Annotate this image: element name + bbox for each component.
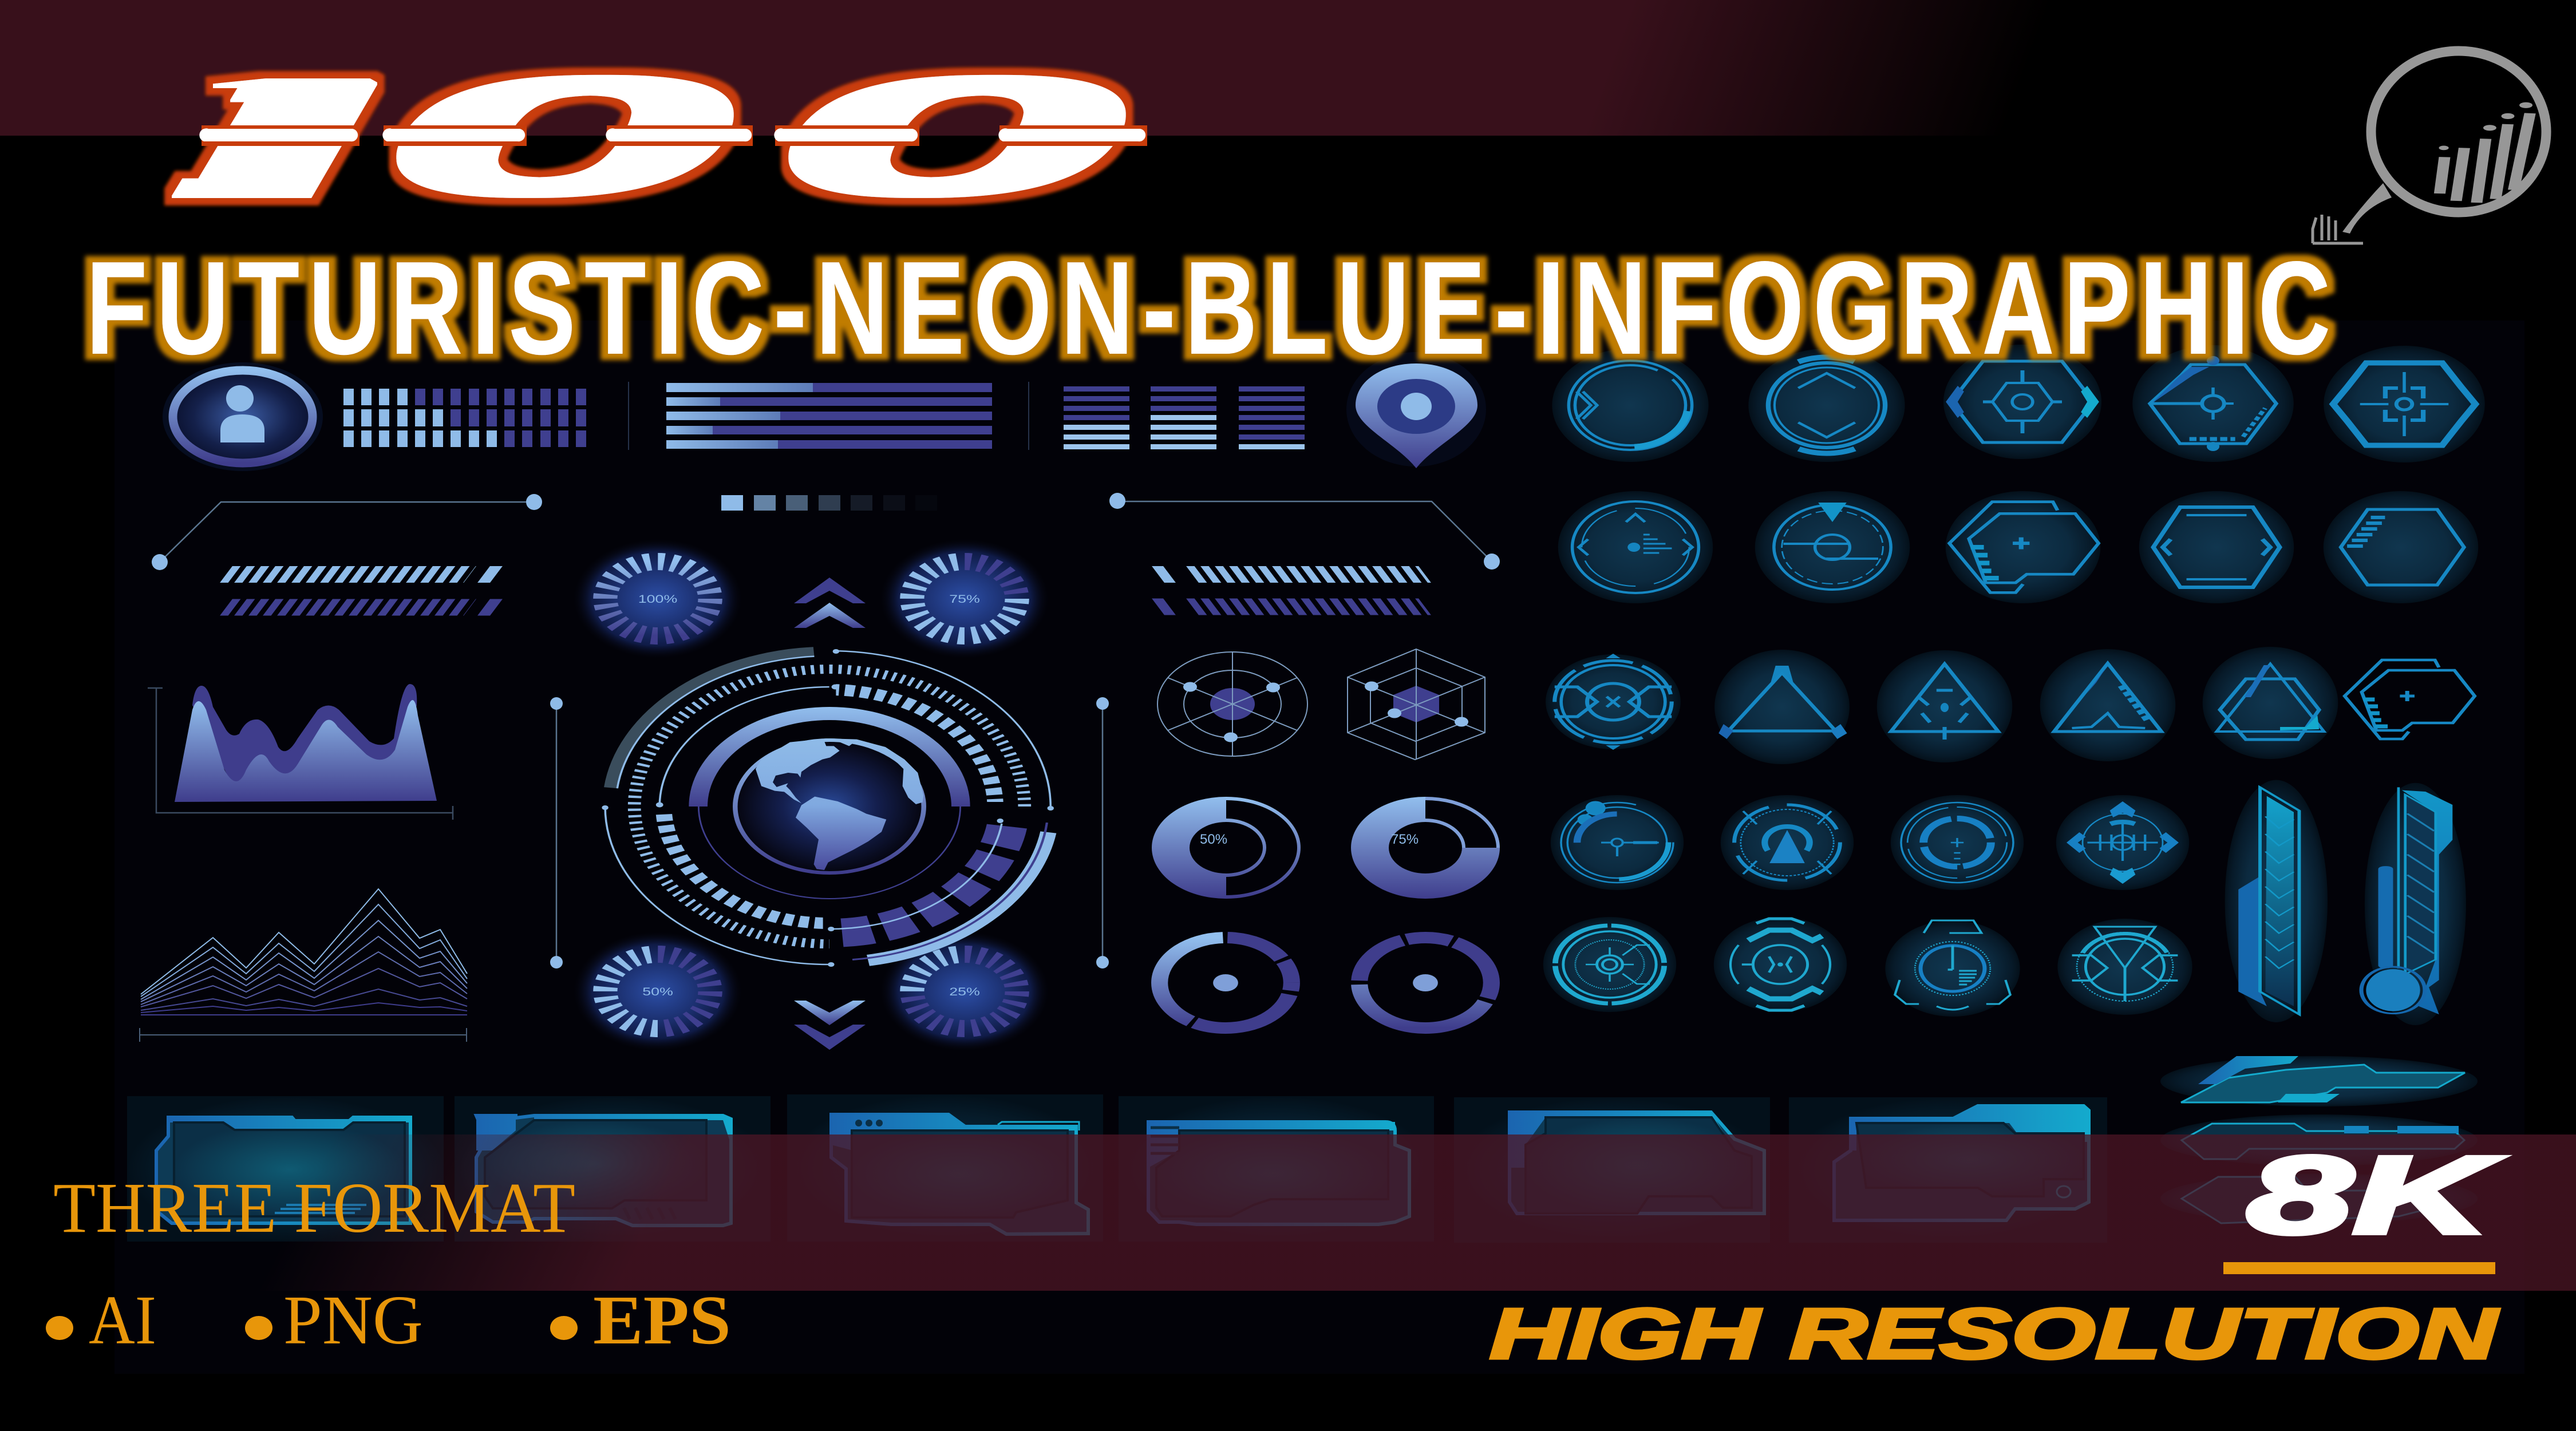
- icon: concentric cyan rings: [1543, 917, 1676, 1012]
- small tech panel 1: [2160, 1056, 2478, 1106]
- title: 100: [161, 65, 1147, 208]
- layered line chart: [140, 889, 467, 1042]
- format list: AI: [89, 1282, 156, 1359]
- bottom frame panels: [127, 1094, 2107, 1243]
- horizontal progress bars: [629, 382, 1029, 450]
- icon grid: row 2: [1558, 491, 2478, 603]
- icon: hexagon target: [1943, 345, 2101, 459]
- globe continents: [756, 738, 923, 870]
- icon: radar ring: [1558, 491, 1713, 603]
- icon grid: row 1: [1552, 345, 2485, 462]
- icon grid: row 5: [1543, 917, 2192, 1017]
- frame 5: [1510, 1112, 1764, 1213]
- frame 3: [831, 1114, 1088, 1234]
- area chart: [148, 684, 453, 820]
- icon: notched hexagon: [2132, 345, 2294, 462]
- dial: 100%: 100%: [638, 593, 677, 605]
- tall gauge left: [2225, 780, 2328, 1022]
- icon: user avatar: [163, 362, 323, 471]
- right hatch bars: [1158, 575, 1425, 607]
- dial: 75%: 75%: [949, 593, 980, 605]
- icon: location pin: [1346, 352, 1486, 468]
- icon: crossed ring: [1546, 654, 1681, 750]
- frame 2: [476, 1116, 731, 1226]
- dial: 75%: [886, 543, 1043, 655]
- title: 100: 0: [720, 41, 1195, 231]
- donut chart: 50%: [1152, 797, 1299, 899]
- icon: gear ring: [1891, 795, 2024, 890]
- equalizer stacks: [1064, 386, 1305, 449]
- radar chart: round: [1157, 652, 1307, 756]
- vertical line left of hub: [550, 697, 563, 969]
- small tech panel 2: [2160, 1114, 2478, 1166]
- left connector line: [152, 494, 542, 570]
- bottom maroon band: [0, 1134, 2576, 1291]
- title: 100: 0: [328, 41, 803, 231]
- format list: PNG: [283, 1282, 423, 1359]
- arrow: down chevrons: [794, 1001, 866, 1050]
- orange rule: [2223, 1262, 2495, 1274]
- icon grid: row 4: [1551, 795, 2189, 890]
- donut chart: 50%: 50%: [1200, 832, 1227, 847]
- icon: hexagon brackets: [2139, 491, 2294, 603]
- radar chart: hexagon: [1348, 649, 1485, 760]
- heading: three format: THREE FORMAT: [53, 1169, 575, 1248]
- left hatch bars: [226, 575, 496, 607]
- icon: triangle reticle: [1877, 650, 2012, 762]
- icon: triangle tabs: [1714, 650, 1850, 764]
- donut chart: 75%: 75%: [1391, 832, 1419, 847]
- central globe hub: [602, 649, 1054, 967]
- title: futuristic neon blue infographic: FUTURISTIC-NEON-BLUE-INFOGRAPHIC: [86, 233, 2331, 382]
- icon: double hexagon: [1946, 491, 2100, 603]
- icon: arrow target: [1721, 795, 1854, 890]
- top maroon band: [0, 0, 2118, 136]
- dark navy artboard: [114, 321, 2524, 1374]
- icon: triangle in ring: [2057, 919, 2192, 1015]
- icon: orbit dial: [1551, 795, 1684, 890]
- icon: winged ring: [1714, 917, 1847, 1012]
- tall gauge right: [2361, 783, 2466, 1025]
- dial: 50%: [579, 935, 736, 1047]
- icon: scope: [2056, 795, 2189, 890]
- icon: ring with diamonds: [1748, 349, 1905, 462]
- icon grid: row 3: [1546, 647, 2475, 764]
- label: high resolution: HIGH RESOLUTION: [1490, 1294, 2499, 1374]
- icon: clock frame: [1885, 920, 2020, 1017]
- dial: 100%: [573, 539, 742, 659]
- arrow: up chevrons: [794, 578, 866, 628]
- icon: hex crosshair: [2324, 346, 2485, 462]
- icon: triangle hexagon: [2203, 647, 2338, 759]
- icon: compass ring: [1755, 491, 1910, 603]
- format list: EPS: [593, 1282, 731, 1359]
- frame 4: [1148, 1122, 1409, 1224]
- label: 8K: 8K: [2247, 1133, 2502, 1256]
- dial: 25%: 25%: [949, 986, 980, 998]
- right connector line: [1109, 493, 1500, 570]
- small tech panel 3: [2160, 1173, 2478, 1224]
- bar grid: [343, 389, 586, 447]
- segmented donut left: [1160, 938, 1291, 1028]
- segmented donut right: [1360, 938, 1491, 1028]
- frame 1: [156, 1117, 410, 1223]
- format list: [46, 1282, 731, 1359]
- donut chart: 75%: [1351, 797, 1500, 899]
- icon: ring with chevron: [1552, 349, 1709, 462]
- logo: magnifier with bars: [2313, 51, 2546, 243]
- dial: 50%: 50%: [642, 986, 673, 998]
- frame 6: [1834, 1106, 2089, 1220]
- icon: nested hexagons: [2345, 660, 2475, 739]
- vertical line right of hub: [1096, 697, 1109, 969]
- icon: hexagon stripes: [2324, 491, 2478, 603]
- square progress row: [721, 495, 937, 511]
- dial: 25%: [886, 935, 1043, 1047]
- icon: triangle notches: [2040, 649, 2175, 761]
